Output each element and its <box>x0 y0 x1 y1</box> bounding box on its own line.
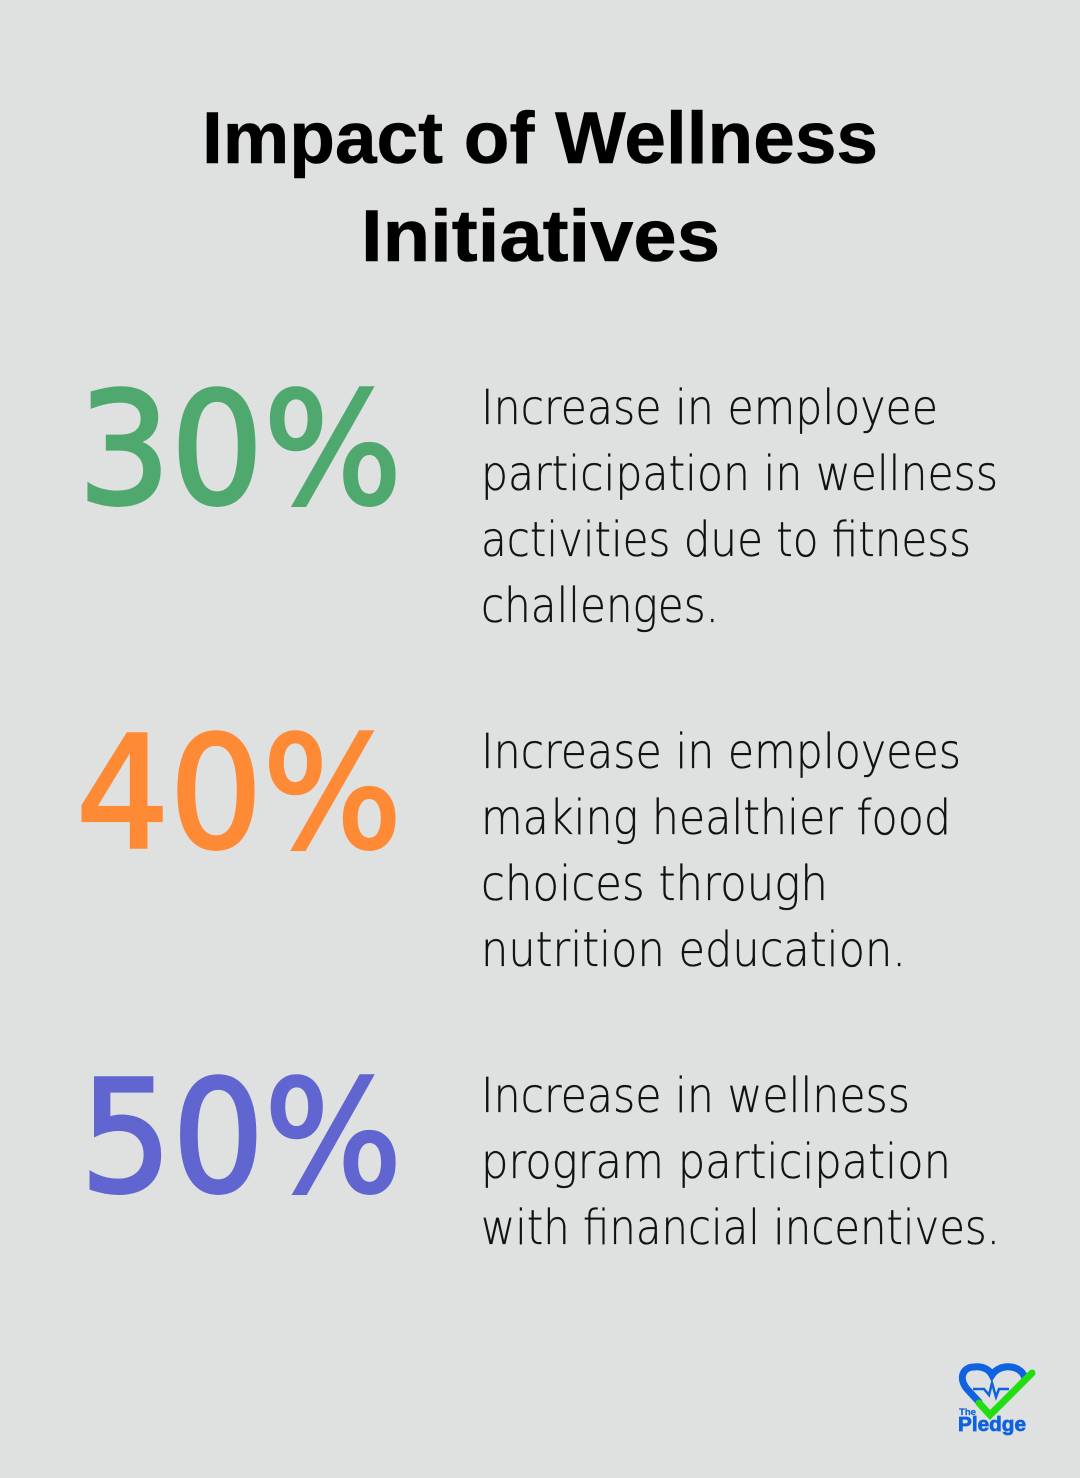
icon: check mark <box>979 1373 1032 1415</box>
text block: financial incentives: program participation <box>481 1134 951 1190</box>
text block: nutrition education: nutrition education. <box>481 922 906 978</box>
title <box>202 98 878 277</box>
text block: fitness challenges: Increase in employee <box>481 380 938 436</box>
text block: nutrition education <box>481 724 961 978</box>
title: Initiatives <box>361 196 720 277</box>
text block: fitness challenges: participation in wellness <box>481 446 998 502</box>
icon: heart outline <box>962 1367 1025 1402</box>
title: Impact of Wellness <box>202 98 878 179</box>
logo: The Pledge <box>958 1367 1032 1436</box>
text block: nutrition education: making healthier food <box>481 790 951 846</box>
text block: fitness challenges <box>481 380 998 634</box>
text block: fitness challenges: challenges. <box>481 578 719 634</box>
text block: nutrition education: Increase in employees <box>481 724 961 780</box>
logo text: Pledge <box>958 1414 1026 1436</box>
text block: fitness challenges: activities due to fitness <box>481 512 971 568</box>
text block: financial incentives: Increase in wellness <box>481 1068 910 1124</box>
text block: nutrition education: choices through <box>481 856 828 912</box>
text block: financial incentives: with financial incentives. <box>481 1200 1000 1256</box>
text block: financial incentives <box>481 1068 1000 1256</box>
logo text: The <box>959 1407 976 1418</box>
stat: 50%: 50% <box>80 1047 402 1228</box>
icon: pulse line <box>973 1383 1009 1397</box>
stat: 30%: 30% <box>78 359 402 540</box>
stat: 40%: 40% <box>76 703 402 884</box>
